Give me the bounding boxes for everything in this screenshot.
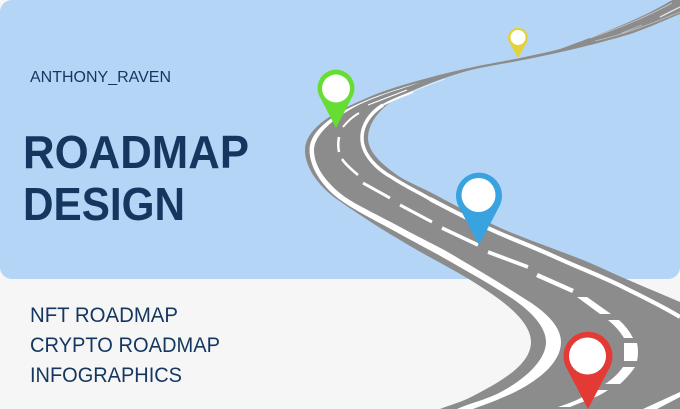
- title: DESIGN: [23, 178, 185, 230]
- far distance lines: [590, 3, 680, 41]
- lower right road line: [643, 392, 680, 409]
- list of services: [30, 304, 220, 387]
- author name: ANTHONY_RAVEN: [30, 69, 171, 86]
- list of services: INFOGRAPHICS: [30, 364, 182, 387]
- centre lane dashes: [338, 90, 573, 291]
- title: [23, 126, 249, 230]
- winding road: [305, 0, 680, 409]
- icon: yellow pin: [508, 28, 528, 58]
- panel: blue header: [0, 0, 680, 279]
- icon: red pin: [564, 332, 612, 409]
- icon: green pin: [318, 70, 355, 128]
- list of services: CRYPTO ROADMAP: [30, 334, 220, 357]
- road surface: [305, 0, 680, 409]
- right road edge line: [362, 79, 680, 317]
- icon: blue pin: [456, 173, 502, 245]
- left road edge line: [310, 82, 561, 409]
- list of services: NFT ROADMAP: [30, 304, 178, 327]
- title: ROADMAP: [23, 126, 249, 178]
